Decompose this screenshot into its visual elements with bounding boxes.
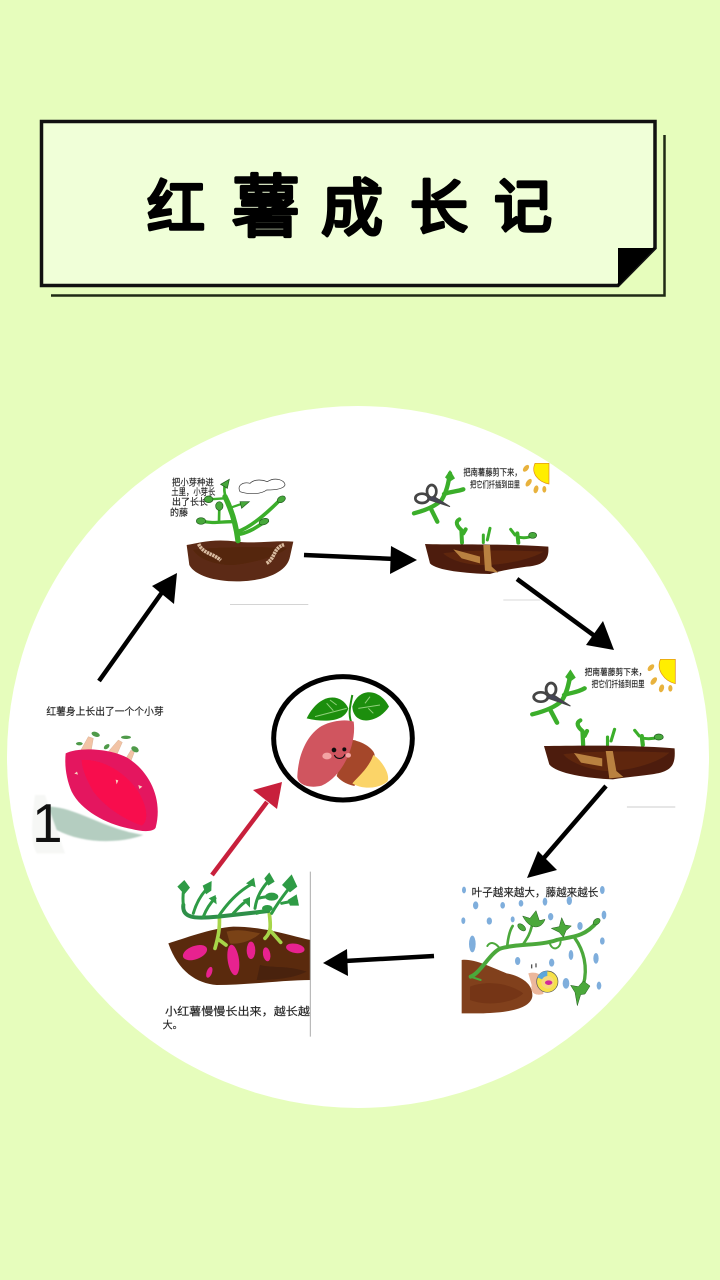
snail xyxy=(528,963,558,995)
arrow: step 4 to step 5 xyxy=(527,786,606,878)
worms xyxy=(199,544,284,563)
panel: step 3 cutting vines xyxy=(414,463,549,600)
white circle background xyxy=(7,406,709,1108)
soil xyxy=(168,927,311,985)
arrow: step 2 to step 3 xyxy=(304,546,417,574)
panel: step 5 growing vine in rain xyxy=(461,885,606,1013)
red potato with face xyxy=(297,720,354,787)
caption: 小红薯慢慢长出来，越长越 xyxy=(165,1005,310,1018)
scissors xyxy=(415,485,450,507)
title banner xyxy=(42,122,664,296)
caption: 大。 xyxy=(163,1018,183,1031)
caption xyxy=(585,666,646,689)
center icon: smiling sweet potatoes xyxy=(274,677,412,800)
caption: 红薯身上长出了一个个小芽 xyxy=(46,705,164,718)
cut stem xyxy=(574,751,623,778)
caption xyxy=(170,477,215,518)
panel: step 4 cutting vines repeat xyxy=(532,659,675,807)
pink tubers xyxy=(181,942,305,979)
title: 红 xyxy=(147,161,205,245)
title: 记 xyxy=(494,160,552,244)
caption: 的藤 xyxy=(170,507,188,518)
caption: 把小芽种进 xyxy=(172,477,214,488)
panel: step 6 tubers under the soil xyxy=(163,872,311,1037)
sprouts xyxy=(80,737,134,763)
arrow: red arrow to result xyxy=(212,782,282,875)
caption: 把南薯藤剪下来， xyxy=(463,466,522,477)
caption: 把南薯藤剪下来， xyxy=(585,666,646,677)
vine xyxy=(202,483,280,541)
leafy vines xyxy=(183,880,297,918)
title xyxy=(147,152,552,251)
cut vine xyxy=(532,674,585,723)
vine with leaves xyxy=(471,922,597,985)
sun xyxy=(646,659,675,693)
caption: 土里，小芽长 xyxy=(171,486,215,497)
step number: 1 xyxy=(32,792,63,854)
soil xyxy=(187,540,293,581)
soil xyxy=(544,746,675,779)
title: 薯 xyxy=(232,152,300,251)
arrow: step 1 to step 2 xyxy=(99,573,177,681)
scissors xyxy=(534,683,570,706)
sprouts xyxy=(578,720,660,745)
shadow xyxy=(48,807,143,841)
caption: 叶子越来越大，藤越来越长 xyxy=(472,885,598,899)
ring xyxy=(274,677,412,800)
sprouts xyxy=(457,519,534,543)
caption: 把它们扦插到田里 xyxy=(592,678,645,689)
leaves xyxy=(307,692,389,722)
rain drops xyxy=(461,886,606,990)
yellow-flesh potato xyxy=(337,739,388,788)
caption: 把它们扦插到田里 xyxy=(470,479,520,489)
cut vine xyxy=(414,473,463,522)
cloud xyxy=(239,479,285,494)
caption: 出了长长 xyxy=(172,496,208,507)
title: 长 xyxy=(410,161,468,245)
panel: step 2 planted sprout with vine xyxy=(170,477,308,604)
soil mound xyxy=(462,960,532,1013)
arrow: step 3 to step 4 xyxy=(517,579,614,650)
sun xyxy=(522,463,549,494)
cut stem xyxy=(453,545,498,573)
tuber xyxy=(65,749,158,831)
arrow: step 5 to step 6 xyxy=(323,949,434,976)
caption xyxy=(163,1005,310,1031)
soil xyxy=(425,544,548,574)
panel: step 1 sprouting sweet potato xyxy=(32,705,164,854)
roots and stems xyxy=(215,913,281,948)
title: 成 xyxy=(321,158,383,248)
caption xyxy=(463,466,522,489)
